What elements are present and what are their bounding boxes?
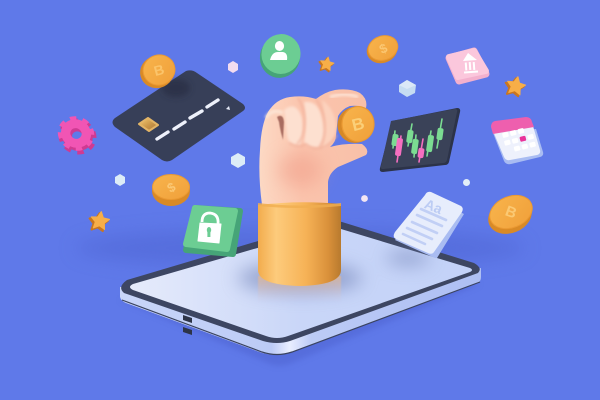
pink gear xyxy=(55,113,99,157)
document lines xyxy=(403,209,446,244)
tablet xyxy=(120,220,481,366)
dollar coin left: $ xyxy=(164,179,179,196)
tablet ports xyxy=(183,315,192,335)
bank symbol xyxy=(463,53,478,73)
document sheet xyxy=(394,192,464,258)
dollar coin top xyxy=(363,32,401,67)
tablet side edge xyxy=(120,268,481,355)
cuff xyxy=(258,202,341,286)
tablet screen xyxy=(130,228,472,338)
orange star right xyxy=(504,74,527,97)
coin shadow on card xyxy=(162,79,190,97)
credit card xyxy=(112,70,245,162)
candlestick chart tablet xyxy=(380,108,460,172)
thumb cavity xyxy=(277,116,284,140)
bitcoin coin top left xyxy=(136,51,178,92)
lock icon xyxy=(198,213,221,243)
palm shading xyxy=(278,153,322,187)
dollar coin top: $ xyxy=(377,40,390,57)
pink candles xyxy=(395,136,425,162)
light blue cube xyxy=(399,80,416,97)
hand holding coin xyxy=(258,89,374,303)
index finger highlight xyxy=(330,94,358,97)
dollar coin left xyxy=(152,174,190,206)
tablet bottom dark line xyxy=(122,282,480,354)
card arrow xyxy=(226,106,230,110)
tablet drop shadow xyxy=(120,270,480,366)
tablet frame xyxy=(121,220,480,343)
shadow on screen xyxy=(238,251,430,293)
bitcoin coin top left: B xyxy=(152,61,166,79)
Aa label: Aa xyxy=(422,196,445,217)
green lock badge xyxy=(186,208,240,254)
finger knuckles xyxy=(284,100,336,148)
card number dashes xyxy=(157,100,218,139)
floating cubes and dots xyxy=(115,61,470,202)
hand xyxy=(259,89,367,205)
orange star left xyxy=(88,210,110,232)
orange star top xyxy=(318,56,335,72)
calendar xyxy=(491,117,543,164)
card chip xyxy=(139,118,158,131)
green user badge xyxy=(254,29,306,84)
calendar dots xyxy=(502,126,536,154)
user icon xyxy=(270,41,287,60)
held coin xyxy=(338,106,374,143)
held coin: B xyxy=(350,114,366,135)
cuff reflection xyxy=(258,276,341,303)
bitcoin coin right xyxy=(483,189,537,240)
finger creases xyxy=(289,98,337,148)
green candles xyxy=(391,119,444,157)
bank icon tile xyxy=(449,51,486,81)
bitcoin coin right: B xyxy=(503,203,519,222)
